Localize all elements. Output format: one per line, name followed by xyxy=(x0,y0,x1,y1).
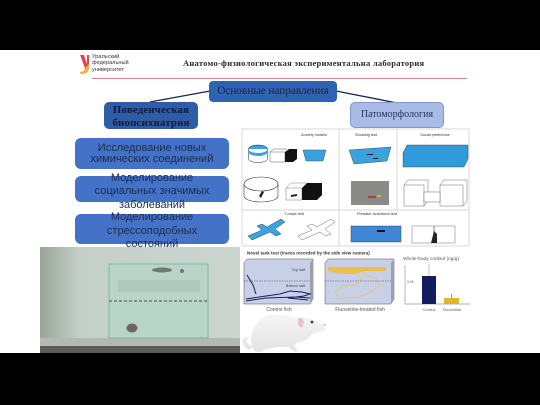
headings: Social preference xyxy=(420,133,450,137)
photo: fish in aquarium xyxy=(40,247,240,353)
headings: Anxiety models xyxy=(301,133,327,137)
cortisol bar chart xyxy=(403,256,470,312)
top black band xyxy=(0,0,540,50)
logo: Ural Federal University: университет xyxy=(92,67,124,73)
control fish tank: Control fish xyxy=(266,307,292,313)
logo: Ural Federal University: федеральный xyxy=(92,60,129,66)
logo: Ural Federal University xyxy=(80,54,129,74)
illustration: white rat xyxy=(242,314,326,352)
title: Анатомо-физиологическая экспериментальна лаборатория xyxy=(183,58,424,68)
blue box: stress-like state modelling: стрессоподобных xyxy=(107,225,197,237)
red header rule xyxy=(92,78,467,79)
control fish tank: Top half xyxy=(292,268,306,272)
heading box: pathomorphology: Патоморфология xyxy=(361,109,433,120)
blue box: social disease modelling xyxy=(75,176,229,202)
connector lines xyxy=(150,90,395,102)
headings: Predator avoidance test xyxy=(357,212,398,216)
heading box: main directions: Основные направления xyxy=(217,85,329,97)
cortisol bar chart: Whole-body cortisol (ng/g) xyxy=(403,256,459,262)
blue box: new chemical compounds: Исследование новых xyxy=(98,142,206,154)
cortisol bar chart: Control xyxy=(423,307,436,312)
predator avoidance xyxy=(351,226,455,243)
bottom black band xyxy=(0,353,540,405)
fluoxetine fish tank: Fluoxetine-treated fish xyxy=(335,307,385,313)
aquarium tank xyxy=(109,264,208,338)
T-maze xyxy=(248,219,335,240)
headings xyxy=(284,133,450,216)
fluoxetine fish tank xyxy=(325,259,394,313)
control fish tank xyxy=(244,259,313,313)
headings: T-maze test xyxy=(284,212,305,216)
social preference xyxy=(403,145,468,206)
blue box: stress-like state modelling: Моделирование xyxy=(111,211,193,223)
heading box: pathomorphology xyxy=(350,102,444,128)
blue box: social disease modelling: социальных значимых xyxy=(95,185,209,197)
figure: novel tank test and cortisol chart: Novel tank test (traces recorded by the side view camera) xyxy=(247,250,370,256)
heading box: behavioural biopsychiatry: Поведенческая xyxy=(113,104,189,116)
anxiety tanks xyxy=(244,145,326,202)
heading box: behavioural biopsychiatry: биопсихиатрия xyxy=(112,117,190,129)
figure: anxiety model diagrams xyxy=(242,128,470,246)
blue box: social disease modelling: Моделирование xyxy=(111,172,193,184)
blue box: new chemical compounds: химических соединений xyxy=(91,152,213,164)
heading box: main directions xyxy=(209,81,337,102)
headings: Shoaling test xyxy=(355,133,378,137)
control fish tank: Bottom half xyxy=(286,284,306,288)
shoaling tank xyxy=(349,147,391,205)
figure: novel tank test and cortisol chart xyxy=(244,250,470,313)
cortisol bar chart: 0.05 xyxy=(407,280,414,284)
text: состояний xyxy=(126,238,178,250)
text: заболеваний xyxy=(119,199,185,211)
blue box: stress-like state modelling xyxy=(75,214,229,244)
blue box: new chemical compounds xyxy=(75,138,229,169)
cortisol bar chart: Fluoxetine xyxy=(443,307,462,312)
logo: Ural Federal University: Уральский xyxy=(92,54,119,60)
heading box: behavioural biopsychiatry xyxy=(104,102,198,128)
